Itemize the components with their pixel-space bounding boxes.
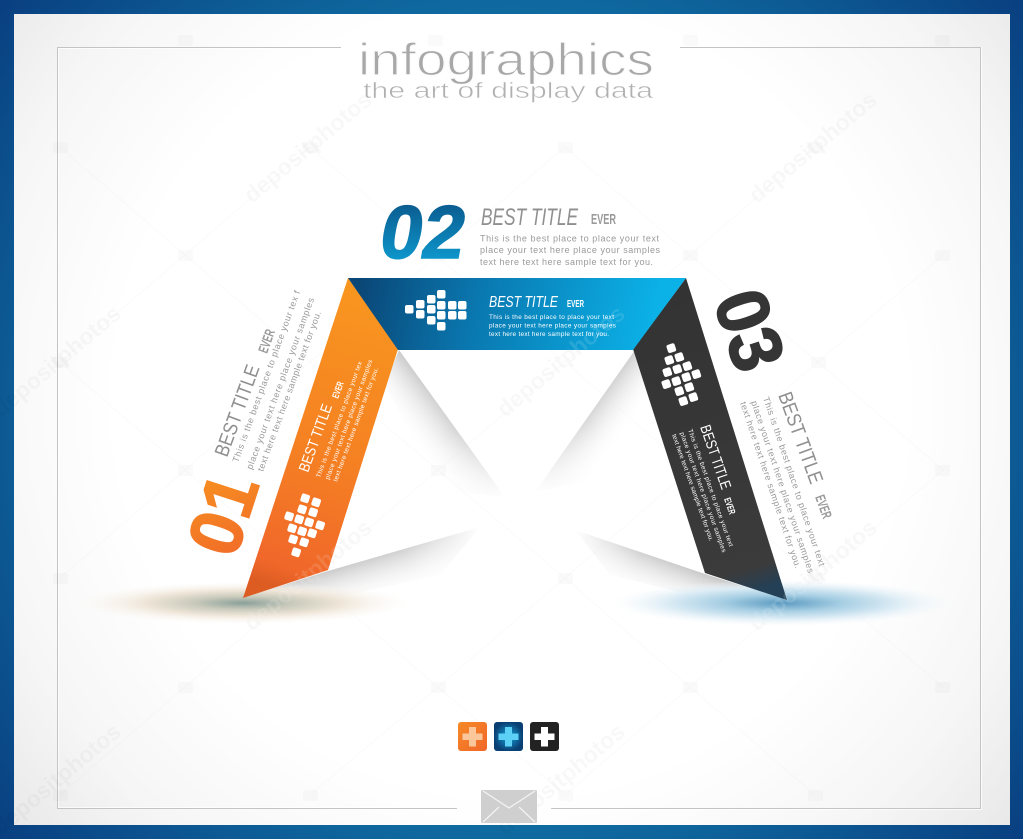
title: the art of display data	[363, 78, 654, 103]
band 03 text: text here text here sample text for you.	[670, 433, 715, 542]
band 01: orange	[243, 278, 398, 598]
watermark lattice	[60, 147, 943, 795]
floor shadow: right	[612, 580, 952, 626]
section 03: heading and text	[738, 389, 835, 575]
band 01 text: This is the best place to place your tex	[315, 360, 364, 479]
section 02: heading and text	[480, 204, 660, 267]
watermark text: depositphotos	[492, 300, 630, 422]
title: infographics	[358, 34, 654, 85]
icon: envelope	[481, 790, 537, 823]
section 01: heading and text: text here text here sample text for you.	[255, 310, 323, 473]
band 03 text: This is the best place to place your text	[686, 428, 734, 548]
band 03 text: EVER	[721, 496, 737, 516]
band 01 text: text here text here sample text for you.	[332, 366, 380, 483]
section 01: heading and text: place your text here place your samples	[244, 296, 316, 471]
band 02 text: BEST TITLE	[489, 294, 558, 311]
section 01: heading and text: EVER	[255, 327, 278, 355]
section 02: heading and text: place your text here place your samples	[480, 245, 660, 255]
section 03: heading and text: place your text here place your samples	[749, 399, 816, 575]
band 03 arrow icon	[661, 343, 702, 407]
section 01: heading number: 01	[171, 463, 275, 565]
watermark overlay on bands: depositphotos	[239, 514, 377, 636]
watermark overlay on bands: depositphotos	[492, 300, 630, 422]
band 02 text	[489, 294, 616, 338]
band 01 text: EVER	[330, 380, 347, 400]
band 03 text	[670, 423, 737, 553]
watermark text: depositphotos	[239, 514, 377, 636]
band 02 text: text here text here sample text for you.	[489, 331, 609, 338]
band 02 text: place your text here place your samples	[489, 322, 616, 330]
band 01 text	[296, 359, 380, 483]
section 02: heading and text: text here text here sample text for you.	[480, 257, 653, 267]
section 01: heading and text: This is the best place to place your tex f	[230, 289, 302, 464]
watermark overlay on bands: depositphotos	[744, 514, 882, 636]
watermark overlay on bands	[239, 300, 882, 636]
section 03: heading number: 03	[698, 279, 801, 381]
section 02: heading number: 02	[374, 192, 473, 275]
band 01 arrow icon	[284, 493, 326, 558]
watermark text: depositphotos	[239, 86, 377, 208]
floor shadow: left	[78, 582, 408, 624]
band 02 arrow icon	[405, 290, 466, 330]
icon: orange plus button	[458, 722, 487, 751]
section 01: heading and text: BEST TITLE	[211, 362, 265, 460]
section 01: heading and text	[211, 289, 323, 473]
section 02: heading and text: This is the best place to place your text	[480, 234, 659, 244]
band 02 text: EVER	[567, 299, 584, 310]
watermark text: depositphotos	[744, 514, 882, 636]
section 03: heading and text: BEST TITLE	[773, 389, 827, 487]
section 02: heading and text: BEST TITLE	[481, 204, 579, 231]
band 03 text: BEST TITLE	[696, 423, 734, 492]
band 02 text: This is the best place to place your text	[489, 314, 614, 321]
icon: blue plus button	[494, 722, 523, 751]
watermark text: depositphotos	[492, 718, 630, 839]
section 03: heading and text: text here text here sample text for you.	[738, 400, 803, 570]
band 01 text: BEST TITLE	[296, 402, 336, 474]
watermark text: depositphotos	[744, 86, 882, 208]
fold shadows	[272, 350, 745, 590]
band 02: blue	[348, 278, 686, 350]
watermark text	[0, 86, 882, 839]
band 03 text: place your text here place your samples	[678, 431, 727, 553]
band 01 text: place your text here place your samples	[324, 359, 374, 481]
icon: black plus button	[530, 722, 559, 751]
band 03: black	[633, 278, 787, 600]
section 03: heading and text: This is the best place to place your text	[761, 395, 827, 568]
title	[358, 34, 654, 103]
section 03: heading and text: EVER	[812, 493, 835, 521]
section 02: heading and text: EVER	[591, 211, 616, 228]
